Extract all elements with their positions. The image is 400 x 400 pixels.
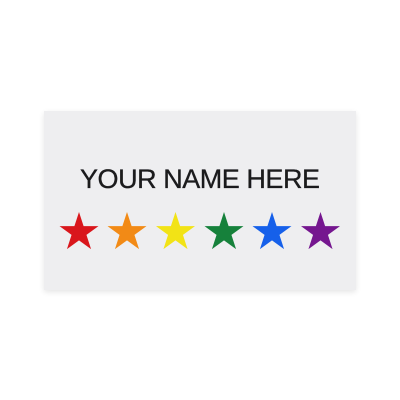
star row <box>60 212 340 249</box>
panel: card <box>44 111 356 290</box>
icon: red star <box>60 212 98 249</box>
icon: yellow star <box>156 212 195 249</box>
icon: blue star <box>252 212 292 249</box>
icon: orange star <box>108 212 146 249</box>
icon: green star <box>204 212 244 249</box>
icon: purple star <box>301 212 340 249</box>
title: your name here: YOUR NAME HERE <box>80 164 320 194</box>
